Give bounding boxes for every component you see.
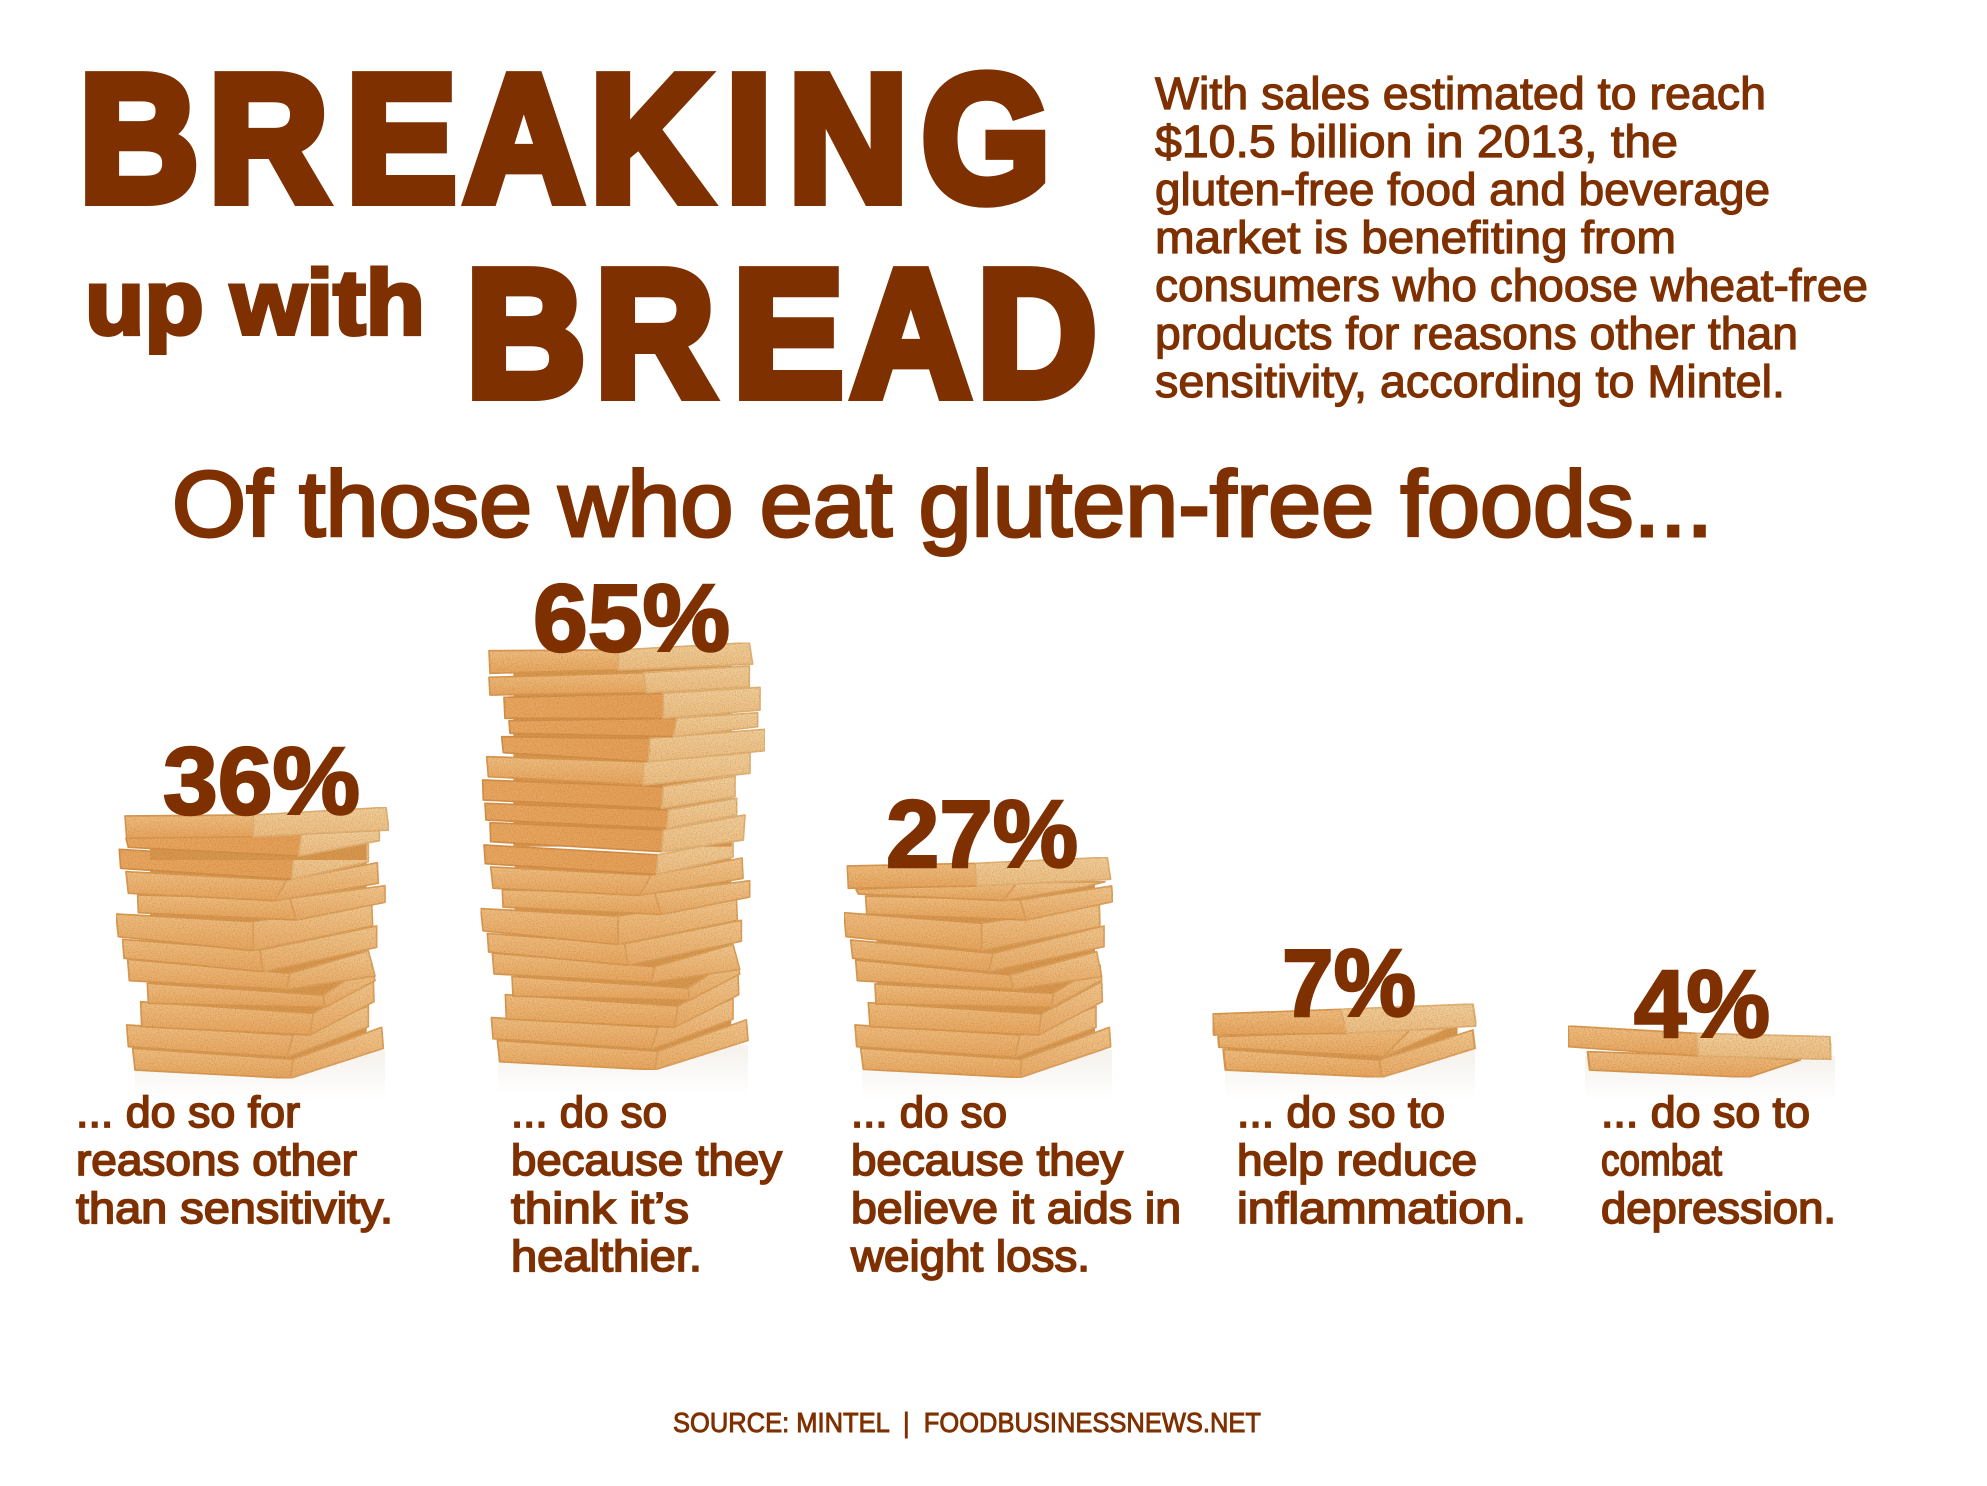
percentage 4: 4% [1634, 951, 1770, 1058]
icon: bread stack 7 percent [1213, 1004, 1476, 1077]
title [79, 37, 1097, 434]
caption: combat [1601, 1136, 1722, 1185]
title word: BREAD: BREAD [466, 232, 1097, 434]
caption: because they [511, 1136, 782, 1185]
intro text block: $10.5 billion in 2013, the [1155, 116, 1678, 167]
intro text block: gluten-free food and beverage [1155, 164, 1770, 215]
percentage 65: 65% [533, 565, 730, 672]
caption: ... do so to [1237, 1088, 1445, 1137]
percentage 36: 36% [163, 728, 360, 835]
caption [511, 1088, 782, 1281]
panel: 36 percent [76, 728, 393, 1233]
percentage 7: 7% [1282, 930, 1416, 1037]
caption: inflammation. [1237, 1184, 1526, 1233]
icon: bread stack 4 percent [1568, 1026, 1831, 1077]
percentage 27: 27% [886, 781, 1078, 888]
caption: weight loss. [850, 1232, 1090, 1281]
bread shadow [862, 1050, 1112, 1100]
caption: ... do so for [76, 1088, 300, 1137]
icon: bread stack 65 percent [481, 643, 765, 1070]
caption: ... do so to [1601, 1088, 1810, 1137]
source line: SOURCE: MINTEL | FOODBUSINESSNEWS.NET [673, 1407, 1261, 1438]
caption: depression. [1601, 1184, 1836, 1233]
intro text block [1155, 68, 1868, 407]
icon: bread stack 27 percent [844, 857, 1113, 1078]
panel: 65 percent [481, 565, 782, 1281]
caption: believe it aids in [851, 1184, 1181, 1233]
bread shadow [498, 1045, 748, 1095]
panel: 27 percent [844, 781, 1181, 1281]
caption: because they [851, 1136, 1123, 1185]
intro text block: market is benefiting from [1155, 212, 1676, 263]
caption: than sensitivity. [76, 1184, 393, 1233]
subtitle heading: Of those who eat gluten-free foods... [172, 452, 1713, 556]
caption [1601, 1088, 1836, 1233]
caption: help reduce [1237, 1136, 1477, 1185]
icon: bread stack 36 percent [116, 807, 389, 1078]
title word: BREAKING: BREAKING [79, 37, 1050, 239]
caption [850, 1088, 1181, 1281]
bread shadow [1585, 1056, 1835, 1100]
caption [1237, 1088, 1526, 1233]
caption: ... do so [511, 1088, 667, 1137]
caption [76, 1088, 393, 1233]
intro text block: consumers who choose wheat-free [1155, 260, 1868, 311]
caption: think it’s [511, 1184, 689, 1233]
intro text block: products for reasons other than [1155, 308, 1798, 359]
title words: up with: up with [85, 252, 425, 354]
caption: healthier. [511, 1232, 702, 1281]
panel: 4 percent [1568, 951, 1836, 1233]
caption: reasons other [76, 1136, 357, 1185]
caption: ... do so [851, 1088, 1007, 1137]
bread shadow [135, 1050, 385, 1100]
bread shadow [1225, 1050, 1475, 1100]
intro text block: sensitivity, according to Mintel. [1155, 356, 1785, 407]
panel: 7 percent [1213, 930, 1526, 1233]
intro text block: With sales estimated to reach [1155, 68, 1766, 119]
